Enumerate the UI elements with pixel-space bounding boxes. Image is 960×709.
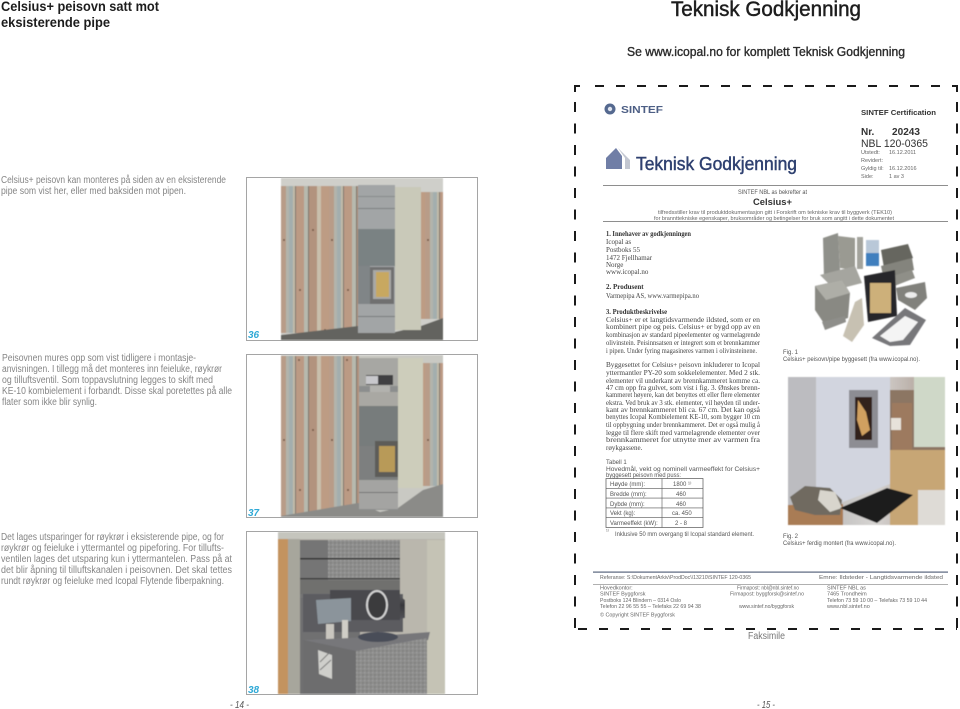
confirmation statement: SINTEF NBL as bekrefter at [738,190,807,196]
section 3 text: Byggesettet for Celsius+ peisovn inkluderer to Icopal [606,361,760,369]
section 1 and 2 text: Varmepipa AS, www.varmepipa.no [606,292,699,300]
document footer addresses: Firmapost: byggforsk@sintef.no [730,592,804,598]
text block: step 36: Celsius+ peisovn kan monteres på siden av en eksisterende [1,174,226,186]
document footer reference: Emne: Ildsteder - Langtidsvarmende ildsted [819,575,943,581]
table: main dimensions: Varmeeffekt (kW): [610,521,658,527]
text block: step 38: rundt røykrør og feieluke med Icopal Flytende fiberpakning. [1,576,224,587]
figure 2 caption [783,534,896,547]
document footer addresses: www.sintef.no/byggforsk [738,604,794,610]
section 3 text: 3. Produktbeskrivelse [606,308,667,316]
table: main dimensions: byggesett peisovn med puss: [606,473,681,479]
certification box: SINTEF Certification [861,110,936,117]
divider rule top [603,185,948,186]
subheading: link to full approval: Se www.icopal.no for komplett Teknisk Godkjenning [627,45,905,59]
text block: step 37: flater som ikke blir synlig. [2,397,97,408]
icon: SINTEF logo: SINTEF [621,105,663,116]
label: facsimile: Faksimile [748,631,785,642]
confirmation statement: tilfredsstiller krav til produktdokumentasjon gitt i Forskrift om tekniske krav til byggverk (TEK10) [658,210,892,216]
divider rule footer [593,583,948,586]
figure 1 caption: Celsius+ peisovn/pipe byggesett (fra www.icopal.no). [783,357,920,363]
confirmation statement: for brannttekniske egenskaper, bruksområder og betingelser for bruk som angitt i dette dokumentet [654,215,894,222]
figure 1 caption [783,350,920,363]
certification box: 16.12.2011 [889,150,916,156]
table: main dimensions: ca. 450 [672,511,692,517]
figure 1 caption: Fig. 1 [783,350,799,356]
text block: step 38: Det lages utsparinger for røykrør i eksisterende pipe, og for [1,532,225,543]
table: main dimensions: 460 [676,492,687,498]
section 3 text: til oppbygning under brennkammeret. Det er også mulig å [606,421,761,429]
certification box: NBL 120-0365 [861,138,928,150]
table: main dimensions: Hovedmål, vekt og nominell varmeeffekt for Celsius+ [606,466,761,473]
section 3 text [606,308,761,452]
text block: step 38: røykrør og feieluke i yttermantel og pipeforing. For tillufts- [1,543,224,554]
table footnote: Inklusive 50 mm overgang til Icopal standard element. [615,532,754,538]
certification box: Utstedt: [861,150,880,156]
confirmation statement: Celsius+ [753,197,792,207]
table footnote [606,528,754,538]
figure 2: finished stove photo [788,377,945,525]
certification box: 16.12.2016 [889,166,917,172]
section 1 and 2 text: www.icopal.no [606,268,649,276]
text block: step 38: ventilen lages det utsparing kun i yttermantelen. Pass på at [1,553,232,565]
table: main dimensions [606,460,761,528]
section 3 text: brennkammeret for utnytte mer av varmen fra [606,436,761,444]
icon: house mark [606,148,630,169]
document footer addresses: Firmapost: nbl@nbl.sintef.no [737,586,799,592]
text block: step 36 [1,174,226,197]
section 3 text: benyttes Icopal Kombielement KE-10, som bygger 10 cm [606,413,761,421]
document footer addresses: Hovedkontor: [600,586,633,592]
figure 36: stove against wooden wall [246,178,478,340]
section 3 text: 47 cm opp fra gulvet, som vist i fig. 3. Ønskes brenn- [606,384,761,392]
section 1 and 2 text: 2. Produsent [606,283,644,291]
section 3 text: Celsius+ er et langtidsvarmende ildsted, som er en [606,316,761,324]
document footer reference [600,575,943,581]
document footer addresses: Telefon 22 96 55 55 – Telefaks 22 69 94 38 [600,604,701,610]
document footer addresses: 7465 Trondheim [827,592,867,598]
document footer addresses: www.nbl.sintef.no [826,604,870,610]
section 3 text: i pipen. Under fyring magasineres varmen i olivinsteinene. [606,347,757,355]
text block: step 37: anvisningen. I tillegg må det monteres inn feieluke, røykrør [2,363,223,375]
section 1 and 2 text: Icopal as [606,238,631,246]
document footer addresses: Telefon 73 59 10 00 – Telefaks 73 59 10 44 [827,598,927,604]
section 3 text: kombinasjon av standard pipeelementer og varmelagrende [606,331,760,339]
figure 37: stove with fittings mounted [246,354,478,518]
section 1 and 2 text: 1472 Fjellhamar [606,254,653,262]
certification box: Nr. [861,127,875,138]
certification box: 20243 [892,127,920,138]
heading: left page title [1,0,159,30]
document footer addresses: Postboks 124 Blindern – 0314 Oslo [600,598,681,604]
text block: step 37: KE-10 kombielement i forbandt. Disse skal poretettes på alle [2,385,232,397]
divider rule [603,221,948,222]
table: main dimensions: Høyde (mm): [610,482,645,488]
table: main dimensions: 2 - 8 [675,521,688,527]
icon: SINTEF logo [604,104,663,116]
document footer addresses [600,586,927,618]
section 1 and 2 text: Postboks 55 [606,246,641,254]
figure 2 caption: Celsius+ ferdig montert (fra www.icopal.no). [783,541,896,547]
section 3 text: olivinstein. Peisinnsatsen er integrert som et brennkammer [606,339,761,347]
section 3 text: kammeret høyere, kan det benyttes ett eller flere elementer [606,391,761,399]
certificate document [593,104,948,618]
text block: step 37: og tilluftsventil. Som toppavslutning legges to skift med [2,375,213,386]
section 3 text: legge til flere skift med varmelagrende elementer over [606,429,761,437]
document footer addresses: © Copyright SINTEF Byggforsk [600,612,675,618]
section 1 and 2 text [606,230,699,300]
heading: left page title: eksisterende pipe [1,14,110,30]
section 3 text: kant av brennkammeret bli ca. 67 cm. Det kan også [606,406,761,414]
table: main dimensions: Bredde (mm): [610,492,647,498]
page number 38: 38 [248,685,260,696]
footer rule [593,572,948,573]
figure 2 caption: Fig. 2 [783,534,799,540]
certification box: 1 av 3 [889,174,904,180]
document footer addresses: SINTEF NBL as [827,586,866,592]
text block: step 37: Peisovnen mures opp som vist tidligere i montasje- [2,353,196,364]
certification box: Side: [861,174,874,180]
section 1 and 2 text: Norge [606,261,623,269]
certification box: Revidert: [861,158,883,164]
table: main dimensions: 1800 ¹⁾ [673,481,692,488]
table: main dimensions: 460 [676,502,687,508]
text block: step 36: pipe som vist her, eller med baksiden mot pipen. [1,186,186,197]
document footer addresses: SINTEF Byggforsk [600,592,646,598]
table: main dimensions: Dybde (mm): [610,502,645,508]
facsimile frame: dashed border [575,86,957,629]
certification box: Gyldig til: [861,166,884,172]
section 1 and 2 text: 1. Innehaver av godkjenningen [606,230,691,238]
confirmation statement [654,190,894,222]
figure 1: kit parts photo [815,233,927,346]
text block: step 38: det blir åpning til tilluftskanalen i peisovnen. Det skal tettes [1,564,232,576]
text block: step 38 [1,532,232,587]
table footnote: ¹⁾ [606,528,610,535]
table: main dimensions: Vekt (kg): [610,511,636,517]
section 3 text: røykgassene. [606,444,643,452]
document title: Teknisk Godkjenning [636,153,797,174]
certification box [861,110,936,180]
table: main dimensions: Tabell 1 [606,460,627,466]
figure 38: close-up of fittings in chimney [246,532,478,694]
document footer reference: Referanse: S:\DokumentArkiv\ProdDoc\\13210\SINTEF 120-0365 [600,575,751,581]
page number 37: 37 [248,508,260,519]
page number 36: 36 [248,330,260,341]
text block: step 37 [2,353,232,408]
section 3 text: elementer vil underkant av brennkammeret komme ca. [606,377,760,385]
section 3 text: ekstra. Ved bruk av 3 stk. elementer, vil høyden til under- [606,399,761,407]
section 3 text: yttermantler PY-20 som sokkelelementer. Med 2 stk. [606,369,760,377]
section 3 text: kombinert pipe og peis. Celsius+ er bygd opp av en [606,323,761,331]
